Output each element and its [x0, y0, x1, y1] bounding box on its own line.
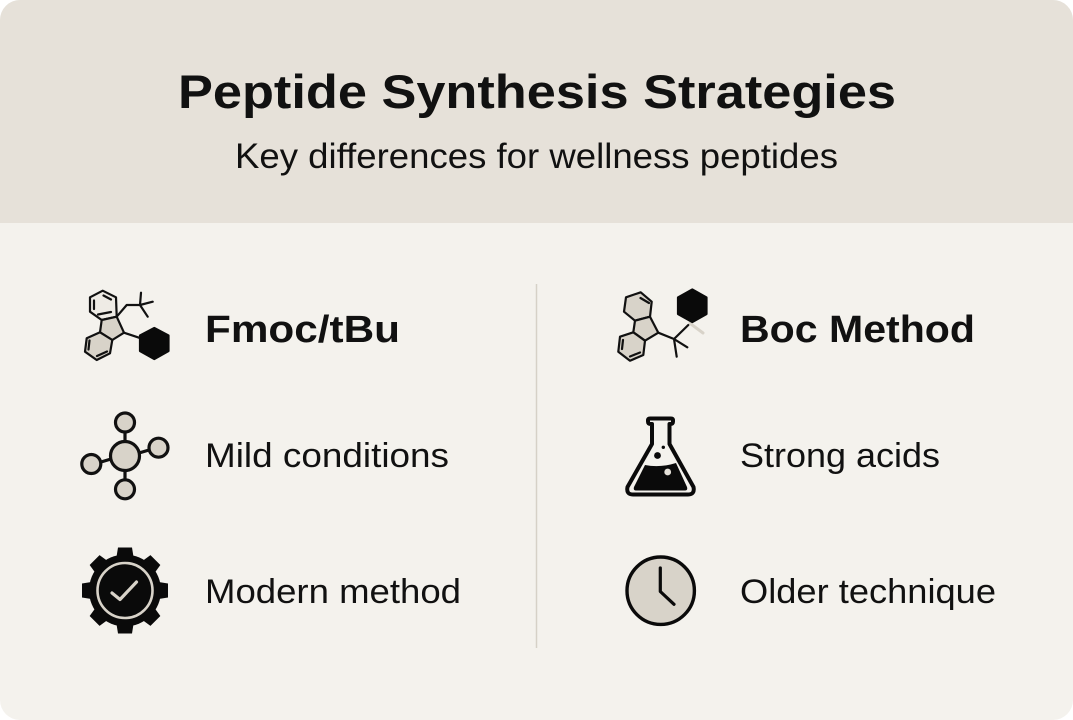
icon: Boc molecule: [618, 290, 706, 361]
subtitle: Key differences for wellness peptides: [235, 137, 838, 176]
heading: Boc Method: Boc Method: [740, 309, 975, 351]
icon: flask: [627, 418, 694, 494]
title: Peptide Synthesis Strategies: [178, 65, 896, 118]
icon: mild conditions network: [82, 413, 168, 499]
icon: gear with check mark: [82, 548, 168, 634]
icon: Fmoc/tBu molecule: [85, 291, 168, 360]
label: Mild conditions: Mild conditions: [205, 437, 449, 475]
heading: Fmoc/tBu: Fmoc/tBu: [205, 309, 400, 351]
icon: clock: [627, 557, 694, 624]
label: Strong acids: Strong acids: [740, 437, 940, 475]
label: Older technique: Older technique: [740, 573, 996, 611]
label: Modern method: Modern method: [205, 573, 461, 611]
